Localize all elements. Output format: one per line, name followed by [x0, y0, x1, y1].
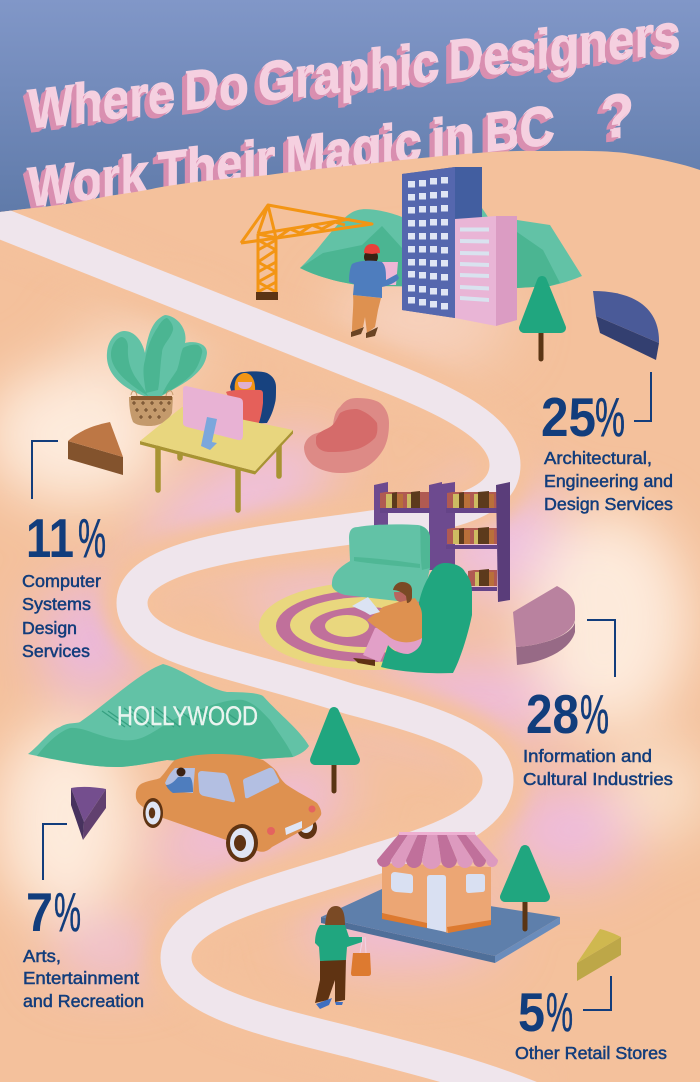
icon: 25% pie slice	[593, 291, 659, 360]
green cushion	[381, 563, 472, 673]
crane	[241, 205, 372, 292]
label: computer systems: Systems	[22, 594, 91, 614]
icon: 28% pie slice	[513, 586, 575, 665]
stat 5%	[518, 981, 573, 1043]
crane base	[256, 292, 278, 300]
tall blue building	[402, 167, 482, 318]
shop platform	[321, 889, 560, 963]
label: information: Cultural Industries	[523, 769, 673, 789]
shopper	[315, 906, 371, 1009]
car	[136, 754, 321, 862]
title: Where Do Graphic Designers	[28, 2, 680, 141]
icon: 5% pie slice	[577, 929, 621, 981]
label: arts: Arts,	[23, 946, 61, 966]
stat 25%: %	[595, 386, 625, 448]
tree	[505, 850, 545, 929]
title: ?	[600, 81, 633, 152]
label: computer systems: Services	[22, 641, 90, 661]
label: arts: Entertainment	[23, 968, 139, 988]
title: Work Their Magic in BC	[28, 94, 554, 219]
panel: hollywood scene	[28, 664, 355, 862]
tree	[524, 281, 561, 359]
label: architectural: Engineering and	[544, 471, 673, 491]
patterned round rug	[259, 584, 420, 670]
bracket 25%	[634, 372, 651, 421]
plant	[107, 315, 207, 397]
blob rug	[304, 398, 389, 473]
bracket 7%	[43, 824, 67, 880]
bracket 11%	[32, 441, 58, 499]
winding road	[0, 207, 540, 1082]
shop house	[382, 863, 491, 933]
icon: 7% pie slice	[71, 787, 106, 840]
stat 28%: 28	[526, 683, 579, 745]
stat 7%: %	[54, 881, 81, 943]
stat 7%	[26, 881, 81, 943]
bookshelf	[374, 482, 510, 602]
shop awning	[377, 832, 498, 869]
worker	[349, 244, 399, 338]
label: computer systems: Computer	[22, 571, 101, 591]
label: architectural: Architectural,	[544, 448, 652, 468]
title	[22, 2, 680, 219]
icon: 11% pie slice	[68, 422, 123, 475]
stat 25%: 25	[541, 386, 596, 448]
sign: hollywood: HOLLYWOOD	[117, 701, 258, 731]
label: information: Information and	[523, 746, 652, 766]
stat 28%: %	[580, 683, 609, 745]
label: computer systems: Design	[22, 618, 77, 638]
label: arts: and Recreation	[23, 991, 144, 1011]
books	[380, 491, 497, 586]
tree	[315, 712, 355, 791]
label: architectural: Design Services	[544, 494, 673, 514]
road glow	[0, 206, 535, 986]
bracket 5%	[583, 976, 611, 1010]
reader	[352, 582, 422, 666]
monitor	[183, 386, 243, 450]
light green armchair	[332, 524, 430, 603]
desk	[140, 407, 293, 510]
green hills behind building	[300, 208, 582, 288]
stat 11%: 11	[26, 507, 74, 569]
panel: retail scene	[315, 832, 560, 1009]
bracket 28%	[587, 620, 615, 677]
stat 11%: %	[78, 507, 106, 569]
pink building	[455, 216, 517, 326]
stat 5%: %	[546, 981, 573, 1043]
stat 7%: 7	[26, 881, 53, 943]
panel: library scene	[259, 482, 510, 673]
hollywood mountain	[28, 664, 309, 767]
chair and person	[226, 371, 276, 429]
stat 5%: 5	[518, 981, 545, 1043]
panel: construction scene	[241, 167, 582, 338]
basket	[129, 391, 173, 426]
label: retail: Other Retail Stores	[515, 1043, 667, 1063]
panel: office scene	[107, 315, 293, 510]
